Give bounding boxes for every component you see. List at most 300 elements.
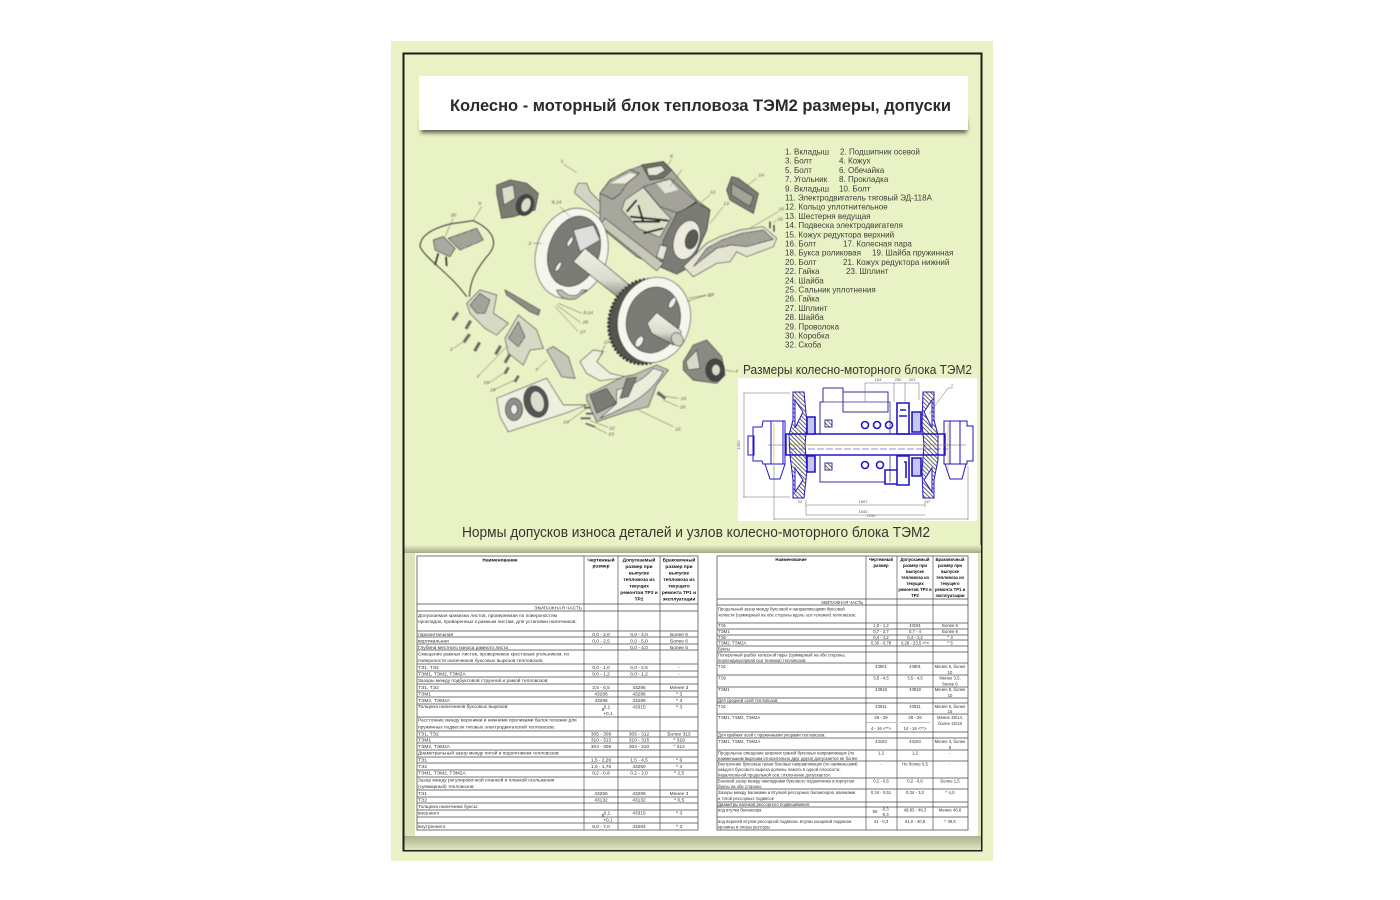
- title banner: [419, 76, 968, 133]
- table rows: 305 - 308: [591, 732, 611, 738]
- part: labels upper: 3: [528, 241, 531, 247]
- part: labels upper: 9: [478, 201, 481, 207]
- table rows: 43918: [909, 687, 922, 692]
- parts list: 32. Скоба: [785, 341, 822, 350]
- table rows: -: [678, 672, 680, 678]
- table rows: +0,1: [603, 711, 613, 717]
- dimension numbers: 203: [909, 377, 916, 382]
- parts list: 17. Колесная пара: [843, 240, 912, 248]
- table rows: 0,0 - 4,0: [630, 632, 648, 638]
- table rows: ЭКИПАЖНАЯ ЧАСТЬ: [534, 606, 582, 612]
- table rows: ТЭ1: [718, 623, 727, 628]
- heading: dimensions: Размеры колесно-моторного блока ТЭМ2: [743, 363, 972, 377]
- part: labels lower: 25: [489, 387, 496, 393]
- table rows: Менее 3: [670, 791, 689, 797]
- table rows: -0,3: [881, 806, 889, 812]
- table header: ремонта ТР1 и: [662, 590, 696, 596]
- part: half shell: [547, 347, 575, 378]
- table rows: Менее 3: [670, 685, 689, 691]
- table rows: ТЭ1: [418, 791, 427, 797]
- dimension numbers: 250: [895, 377, 902, 382]
- table rows: 43284: [632, 824, 646, 830]
- table rows: ТЭ1: [718, 664, 727, 669]
- table rows: ^ 2,5: [674, 770, 684, 776]
- table rows: 0,0 - 2,5: [630, 665, 648, 671]
- table rows: ^ 3: [676, 698, 682, 704]
- table rows: 3,5 - 4,5: [907, 676, 923, 680]
- table rows: 4 - 16 <**>: [871, 726, 892, 731]
- table rows: 1,0 - 1,76: [591, 764, 611, 770]
- parts list: 22. Гайка: [785, 267, 820, 276]
- table rows: 310 - 313: [591, 738, 611, 744]
- table rows: каждого буксового выреза должны лежать в одной плоскости,: [718, 767, 841, 772]
- table rows: 43286: [632, 698, 646, 704]
- part: leader lines: [445, 159, 778, 298]
- table header: размер при: [625, 565, 653, 570]
- table rows: Смещение рамных листов, проверяемое крестовым угольником, по: [418, 652, 570, 658]
- part: right wheel disc and shaft: [619, 281, 688, 359]
- table rows: 0,2 - 2,0: [630, 770, 648, 776]
- table rows: 304 - 310: [629, 744, 649, 750]
- parts list: 4. Кожух: [839, 157, 871, 166]
- table rows: челюсти (суммарный на обе стороны вдоль оси тележки) тепловозов:: [718, 612, 856, 618]
- table rows: ТЭМ1, ТЭМ2, ТЭМ2А: [418, 672, 466, 678]
- table rows: -: [880, 762, 882, 766]
- table header: текущих: [629, 584, 649, 590]
- table rows: 43286: [632, 791, 646, 797]
- table header: тепловоза из: [623, 578, 655, 583]
- table rows: 0,1: [604, 810, 611, 816]
- table rows: горизонтальная: [418, 633, 454, 638]
- part: spring clip: [557, 290, 587, 299]
- dimension numbers: 1050: [736, 440, 741, 449]
- table header: размер при: [903, 563, 927, 568]
- title: Колесно - моторный блок тепловоза ТЭМ2 размеры, допуски: [450, 96, 951, 115]
- table rows: 6: [949, 745, 952, 750]
- table rows: 304 - 306: [591, 744, 611, 750]
- table rows: 1,2: [878, 750, 885, 756]
- table rows: Более 6: [942, 629, 959, 634]
- table rows: 50: [873, 809, 878, 814]
- table rows: 43901: [909, 664, 922, 669]
- part: labels upper: 13: [723, 201, 729, 207]
- parts list: 24. Шайба: [785, 276, 824, 285]
- table header: тепловоза из: [901, 575, 929, 580]
- part: labels lower: [450, 293, 738, 438]
- table rows: Внутренние буксовые грани боковых направляющих (по наименьшим): [718, 762, 858, 766]
- table rows: -: [949, 750, 951, 756]
- table rows: ^ 0,5: [674, 798, 684, 804]
- table rows: 15: [948, 709, 953, 714]
- table rows: прокладок, приваренных к рамным листам, для установки наличников:: [418, 620, 577, 625]
- part: labels upper: 17: [708, 293, 714, 299]
- table rows: более 6: [942, 682, 958, 686]
- left journal box: [748, 421, 785, 479]
- table grid: [417, 556, 698, 830]
- parts list: 25. Сальник уплотнения: [785, 286, 876, 294]
- part: bracket two: [505, 315, 543, 365]
- parts list: 13. Шестерня ведущая: [785, 212, 871, 221]
- table rows: Более 6: [670, 632, 688, 638]
- table rows: ТЭ1: [718, 704, 727, 709]
- table rows: Буксы: [718, 646, 730, 652]
- part: labels upper: 8,14: [552, 199, 562, 205]
- table rows: ТЭМ1: [418, 692, 431, 698]
- dimension numbers: 163: [875, 377, 882, 382]
- table rows: Допускаемая кривизна листов, проверяемая по поверхностям: [418, 613, 557, 619]
- table header: ремонтов ТР3 и: [898, 587, 932, 592]
- table rows: ^ 6: [676, 758, 682, 764]
- parts list: 5. Болт: [785, 166, 812, 175]
- part: labels lower: 26: [582, 319, 588, 325]
- dimension numbers: 1640: [859, 509, 868, 514]
- parts list: 16. Болт: [785, 240, 817, 248]
- table rows: 8: [602, 813, 605, 819]
- table rows: Для крайних осей с пружинными упорами тепловозов:: [718, 732, 825, 738]
- table rows: 0,2 - 0,6: [873, 778, 889, 784]
- table rows: 41,0 - 40,8: [905, 819, 926, 824]
- table rows: 6,0 - 7,0: [592, 824, 610, 830]
- parts list: 15. Кожух редуктора верхний: [785, 230, 894, 239]
- table rows: Менее 6, более: [935, 664, 966, 669]
- table rows: 0,0 - 2,5: [592, 638, 610, 644]
- table rows: 43286: [594, 692, 608, 698]
- dimension numbers: 47: [926, 499, 931, 504]
- table rows: 0,0 - 1,0: [592, 665, 610, 671]
- table header: тепловоза из: [663, 578, 695, 583]
- table rows: 1,2: [912, 750, 919, 756]
- part: labels lower: 2: [476, 373, 480, 379]
- dimension drawing panel: [736, 377, 977, 521]
- part: labels lower: 19: [681, 396, 686, 402]
- table: left norms: [417, 556, 698, 830]
- table rows: 43132: [594, 798, 608, 804]
- table rows: Более 6: [670, 638, 688, 644]
- motor frame: [820, 388, 890, 482]
- table rows: кронины и опоры рессоры: [718, 824, 770, 830]
- upper group of parts: [420, 153, 784, 372]
- part: labels lower: 1: [450, 347, 453, 353]
- table rows: 0,34 - 3,0: [906, 790, 925, 795]
- table rows: 43191: [909, 623, 922, 628]
- table rows: Не более 0,5: [902, 762, 928, 766]
- table header: размер: [592, 564, 610, 570]
- part: labels upper: 12: [710, 189, 716, 195]
- parts list: 26. Гайка: [785, 295, 820, 304]
- table rows: -: [678, 666, 680, 671]
- table header: ремонтов ТР3 и: [620, 590, 658, 596]
- part: labels lower: 23: [603, 339, 610, 345]
- table header: текущего: [668, 584, 690, 590]
- table rows: Более 1,5: [940, 778, 960, 784]
- parts list: 30. Коробка: [785, 332, 830, 340]
- table rows: 310 - 315: [629, 738, 649, 744]
- part: labels upper: 14: [758, 173, 764, 179]
- table rows: Продольное смещение широких граней буксовых направляющих (по: [718, 750, 855, 756]
- table rows: ^ 3: [676, 692, 682, 698]
- table rows: Менее 6, более: [935, 704, 966, 709]
- table rows: ^ 3: [676, 810, 682, 816]
- table rows: ^ 314: [673, 744, 685, 750]
- table rows: 0,2 - 0,6: [907, 778, 923, 784]
- table rows: 28 - 29: [908, 715, 922, 720]
- dimension numbers: 2190: [867, 513, 876, 518]
- table rows: Менее 28/14,: [937, 715, 963, 720]
- table header: Наименование: [775, 557, 807, 562]
- part: labels upper: 8: [670, 153, 673, 159]
- table rows: Менее 6, более: [935, 687, 966, 692]
- table rows: ТЭМ2, ТЭМ2А: [418, 744, 451, 750]
- table rows: Толщина наличника буксы:: [418, 804, 478, 810]
- table rows: Диаметральный зазор между пятой и подпятником тепловозов:: [418, 750, 560, 756]
- part: grille: [727, 177, 758, 213]
- table rows: наименьшим вырезам относительно друг друга) допускается не более: [718, 756, 858, 761]
- table rows: 43193: [909, 739, 922, 744]
- part: bolts: [451, 312, 666, 428]
- table rows: Более 5: [670, 645, 688, 651]
- table header: размер: [873, 563, 889, 568]
- table rows: 10: [948, 693, 953, 698]
- table rows: 28 - 29: [874, 715, 888, 720]
- table rows: ЭКИПАЖНАЯ ЧАСТЬ: [821, 600, 863, 605]
- table header: ТР2: [635, 596, 644, 602]
- table rows: (суммарный) тепловозов:: [418, 783, 475, 790]
- heading: wear norms: Нормы допусков износа деталей и узлов колесно-моторного блока ТЭМ2: [462, 525, 930, 541]
- part: labels lower: 18: [483, 380, 489, 386]
- part: terminal box with wire: [420, 221, 494, 297]
- table rows: 0,28 - 23,5 <*>: [901, 640, 930, 646]
- parts list: 19. Шайба пружинная: [872, 249, 953, 258]
- table rows: Для средней осей тепловозов:: [718, 698, 778, 703]
- table rows: Поперечный разбег колесной пары (суммарный на обе стороны,: [718, 652, 846, 658]
- table header: выпуске: [906, 569, 925, 574]
- table rows: 43315: [632, 810, 646, 816]
- table rows: 305 - 312: [629, 732, 649, 738]
- table rows: ТЭ1, ТЭ2: [418, 685, 439, 691]
- parts list: 20. Болт: [785, 258, 817, 267]
- table rows: 3,5 - 4,5: [873, 676, 889, 680]
- part: labels lower: 21: [674, 427, 681, 433]
- part: drive gear and right wheel: [599, 269, 700, 372]
- table rows: пружинных подвесок тяговых электродвигателей тепловозов:: [418, 724, 555, 730]
- right journal box: [944, 421, 973, 479]
- table rows: ТЭ2: [418, 764, 427, 770]
- table: right norms: [717, 556, 968, 830]
- table rows: 14 - 16 <**>: [904, 726, 927, 731]
- table rows: 43286: [594, 698, 608, 704]
- table rows: ТЭМ1, ТЭМ2, ТЭМ2А: [718, 739, 760, 744]
- table rows: Зазоры между валиками и втулкой рессорных балансиров, валиками: [718, 790, 856, 795]
- table rows: ^ 3: [676, 704, 682, 710]
- parts list: [785, 148, 953, 350]
- table rows: 1,5 - 2,26: [591, 758, 611, 764]
- part: left axle box: [497, 180, 538, 218]
- part: bracket one: [467, 290, 508, 335]
- table rows: [718, 600, 966, 830]
- table rows: поверхности наличников буксовых вырезов тепловозов:: [418, 658, 543, 664]
- parts list: 28. Шайба: [785, 313, 824, 322]
- table rows: Более 313: [667, 732, 691, 738]
- parts list: 6. Обечайка: [839, 166, 885, 175]
- table rows: 1,5 - 4,5: [630, 758, 648, 764]
- panel: tables sheet: [415, 553, 978, 836]
- part: labels lower: 7: [535, 368, 538, 374]
- table rows: -: [600, 646, 602, 651]
- table rows: ^ 4: [676, 764, 682, 770]
- table header: ТР2: [911, 593, 920, 598]
- table rows: 0,0 - 2,0: [592, 632, 610, 638]
- table rows: 0,0 - 1,2: [630, 672, 648, 678]
- table rows: ^ 316: [673, 738, 685, 744]
- table rows: ТЭМ1: [418, 738, 431, 744]
- table rows: +0,1: [603, 818, 613, 824]
- table rows: более 32/18: [938, 721, 962, 726]
- part: labels lower: 27: [579, 329, 586, 335]
- parts list: 11. Электродвигатель тяговый ЭД-118А: [785, 194, 933, 202]
- dimension numbers: 1507: [859, 499, 868, 504]
- table rows: ТЭМ1: [718, 629, 730, 634]
- table header: размер при: [938, 563, 962, 568]
- table header: выпуске: [629, 572, 649, 576]
- part: axle: [573, 248, 633, 300]
- table rows: Более 6: [942, 623, 959, 628]
- parts list: 2. Подшипник осевой: [840, 148, 920, 156]
- table rows: перпендикулярная оси тележки) тепловозов:: [718, 658, 806, 663]
- part: suspension pin: [505, 290, 540, 315]
- table header: выпуске: [669, 572, 689, 576]
- table header: текущего: [940, 581, 960, 586]
- table header: эксплуатации: [663, 598, 695, 602]
- parts list: 8. Прокладка: [839, 175, 889, 184]
- table header: Браковочный: [663, 556, 695, 564]
- table rows: внешнего: [418, 812, 440, 816]
- table rows: 0,30 - 0,78: [871, 640, 892, 646]
- table rows: Диаметры валиков рессорного подвешивания:: [718, 802, 810, 807]
- table rows: 43132: [632, 798, 646, 804]
- table header: Допускаемый: [900, 557, 930, 562]
- table rows: 43901: [875, 664, 888, 669]
- part: lens detail: [580, 350, 627, 381]
- table rows: буксы на обе стороны: [718, 784, 761, 789]
- table rows: ТЭМ1, ТЭМ2, ТЭМ2А: [718, 715, 760, 720]
- table rows: 43286: [632, 692, 646, 698]
- part: labels lower: 8,14: [583, 310, 593, 316]
- table rows: 0,0 - 1,2: [592, 672, 610, 678]
- table rows: вод верхней втулки рессорной подвески, втулки концевой подвески: [718, 819, 852, 824]
- table rows: ТЭ2: [718, 676, 727, 680]
- table rows: 43256: [594, 791, 608, 797]
- table rows: 1,0 - 1,2: [873, 623, 889, 628]
- table rows: ТЭМ2, ТЭМ2А: [718, 640, 746, 646]
- parts list: 21. Кожух редуктора нижний: [843, 258, 949, 267]
- part: labels upper: 30: [451, 213, 456, 219]
- part: labels lower: 20: [679, 405, 686, 411]
- table rows: Менее 3,5,: [939, 676, 961, 680]
- table header: эксплуатации: [936, 593, 965, 598]
- table rows: ТЭ1, ТЭ2: [418, 732, 439, 738]
- part: labels lower: 4: [735, 369, 738, 375]
- table rows: Расстояние между верхними и нижними приливами балок тележки для: [418, 718, 577, 724]
- table header: Допускаемый: [623, 556, 655, 564]
- parts list: 7. Угольник: [785, 175, 828, 184]
- part: leader lines: [453, 295, 734, 433]
- table header: [775, 557, 966, 598]
- table rows: Менее 3, более: [935, 739, 966, 744]
- table rows: 41 - 0,3: [874, 819, 889, 824]
- table rows: вод втулки балансира: [718, 808, 762, 812]
- table rows: -: [949, 762, 951, 766]
- table rows: ^ 3: [676, 824, 682, 830]
- table rows: Боковой зазор между накладками буксового подшипника и корпусом: [718, 778, 854, 784]
- parts list: 9. Вкладыш: [785, 184, 829, 193]
- table rows: ^ 5: [947, 640, 953, 646]
- table rows: 3,5 - 6,5: [592, 685, 610, 691]
- parts list: 29. Проволока: [785, 322, 840, 331]
- parts list: 3. Болт: [785, 157, 812, 166]
- gear and bearings: [807, 403, 921, 485]
- table header: Чертежный: [587, 556, 615, 564]
- panel: poster black frame: [404, 54, 982, 850]
- parts list: 27. Шплинт: [785, 304, 828, 313]
- table rows: Продольный зазор между буксовой и направляющими буксовой: [718, 606, 845, 612]
- panel: table shadows: [404, 545, 981, 850]
- table rows: ^ 39,5: [944, 819, 956, 824]
- table rows: вертикальная: [418, 640, 449, 644]
- table rows: 0,0 - 4,0: [630, 645, 648, 651]
- table rows: Менее 46,8: [939, 808, 962, 812]
- parts list: 14. Подвеска электродвигателя: [785, 221, 903, 230]
- table rows: ТЭ1, ТЭ2: [418, 665, 439, 671]
- table rows: 0,0 - 5,0: [630, 638, 648, 644]
- dimension numbers: 7: [951, 383, 954, 388]
- parts list: 10. Болт: [839, 184, 871, 193]
- table rows: 49,83 - 46,3: [904, 808, 927, 812]
- part: right axle box: [683, 340, 725, 383]
- table rows: ТЭМ1, ТЭМ2, ТЭМ2А: [418, 770, 466, 776]
- table rows: 43911: [909, 704, 921, 709]
- table header: Браковочный: [935, 557, 965, 562]
- table rows: и тягой рессорных подвесок: [718, 796, 774, 801]
- table rows: 43911: [875, 704, 887, 709]
- table rows: 8: [602, 707, 605, 713]
- table rows: Зазоры между подбуксовой струнной и рамой тепловозов:: [418, 677, 549, 684]
- table header: размер при: [665, 565, 693, 570]
- table rows: ———————: [900, 720, 931, 725]
- table rows: 43918: [875, 687, 888, 692]
- table rows: ———————: [866, 720, 897, 725]
- table rows: -0,3: [881, 812, 889, 817]
- table rows: 0,7 - 4: [909, 629, 922, 634]
- table rows: 43286: [632, 685, 646, 691]
- table header: Наименование: [482, 558, 518, 564]
- table header: тепловоза из: [936, 575, 964, 580]
- part: labels upper: 1: [561, 159, 564, 165]
- left wheel section: [789, 392, 807, 498]
- table rows: Толщина наличников буксовых вырезов:: [418, 704, 508, 710]
- table rows: 0,2 - 0,8: [592, 770, 610, 776]
- part: sealing flange: [497, 378, 587, 432]
- dimension numbers: [736, 377, 954, 518]
- table rows: внутреннего: [418, 825, 446, 830]
- table rows: [418, 606, 691, 830]
- table header: текущих: [906, 581, 924, 586]
- parts list: 12. Кольцо уплотнительное: [785, 203, 888, 212]
- panel: poster background: [391, 41, 993, 861]
- table header: Чертежный: [869, 557, 893, 562]
- part: labels lower: 23: [607, 432, 614, 438]
- table rows: 0,4 - 1,2: [907, 635, 923, 640]
- right wheel section: [922, 392, 938, 498]
